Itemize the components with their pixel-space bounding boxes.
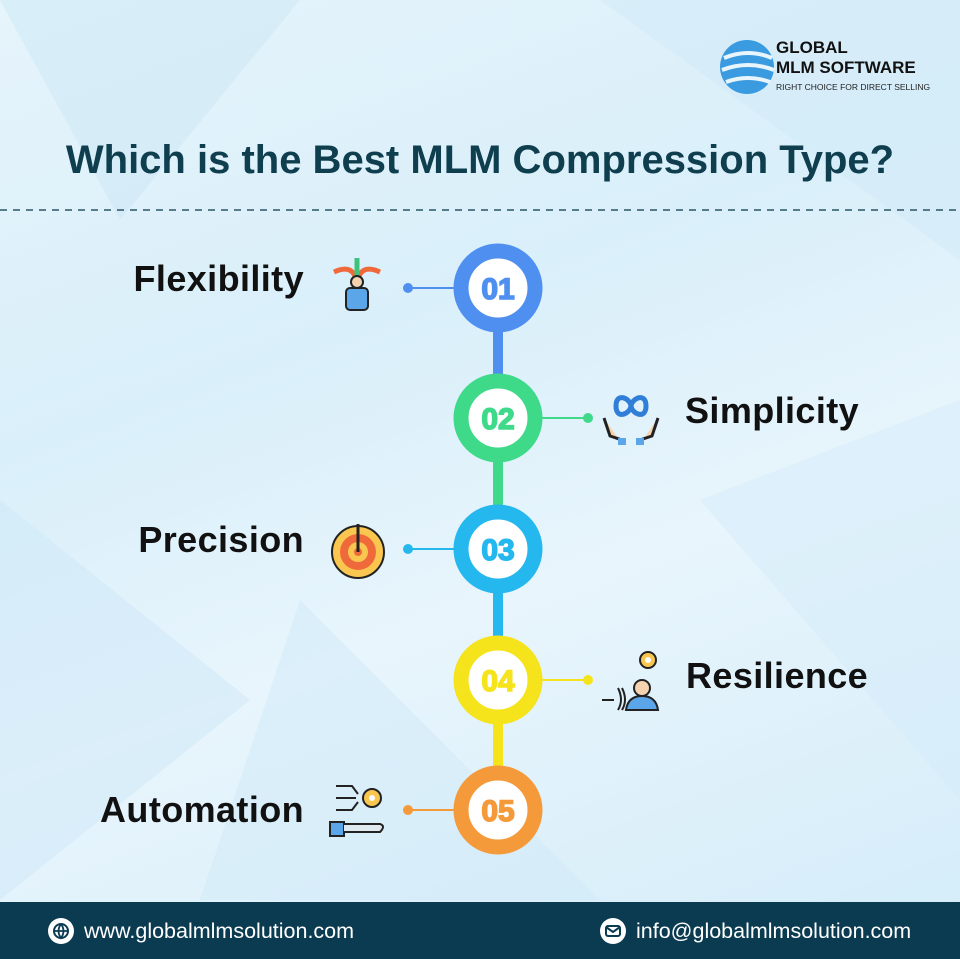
logo: RIGHT CHOICE FOR DIRECT SELLING xyxy=(776,82,930,92)
icon: flexibility arrows xyxy=(333,258,381,311)
label: Resilience: Resilience xyxy=(686,655,868,696)
email: info@globalmlmsolution.com xyxy=(636,918,911,942)
logo: GLOBAL xyxy=(776,38,848,57)
icon: person gear xyxy=(602,651,660,711)
item 01 xyxy=(403,251,535,325)
item 04: 04 xyxy=(481,665,515,698)
timeline xyxy=(403,244,593,854)
item 04 xyxy=(461,643,593,717)
item 02 xyxy=(461,381,593,455)
item 05: 05 xyxy=(481,795,515,828)
item 02: 02 xyxy=(481,403,515,436)
item 01: 01 xyxy=(481,273,515,306)
footer xyxy=(0,902,960,959)
website: www.globalmlmsolution.com xyxy=(84,918,354,942)
icon: hands infinity xyxy=(602,395,660,445)
icon: robot hand gear xyxy=(329,785,384,837)
item 03: 03 xyxy=(481,534,515,567)
logo: MLM SOFTWARE xyxy=(776,58,916,77)
icon: target xyxy=(331,524,385,579)
label: Simplicity: Simplicity xyxy=(685,390,859,431)
title: Which is the Best MLM Compression Type? xyxy=(66,138,894,182)
label: Automation: Automation xyxy=(100,789,304,830)
item 03 xyxy=(403,512,535,586)
logo xyxy=(720,38,930,94)
label: Precision: Precision xyxy=(138,519,304,560)
label: Flexibility: Flexibility xyxy=(134,258,304,299)
item 05 xyxy=(403,773,535,847)
